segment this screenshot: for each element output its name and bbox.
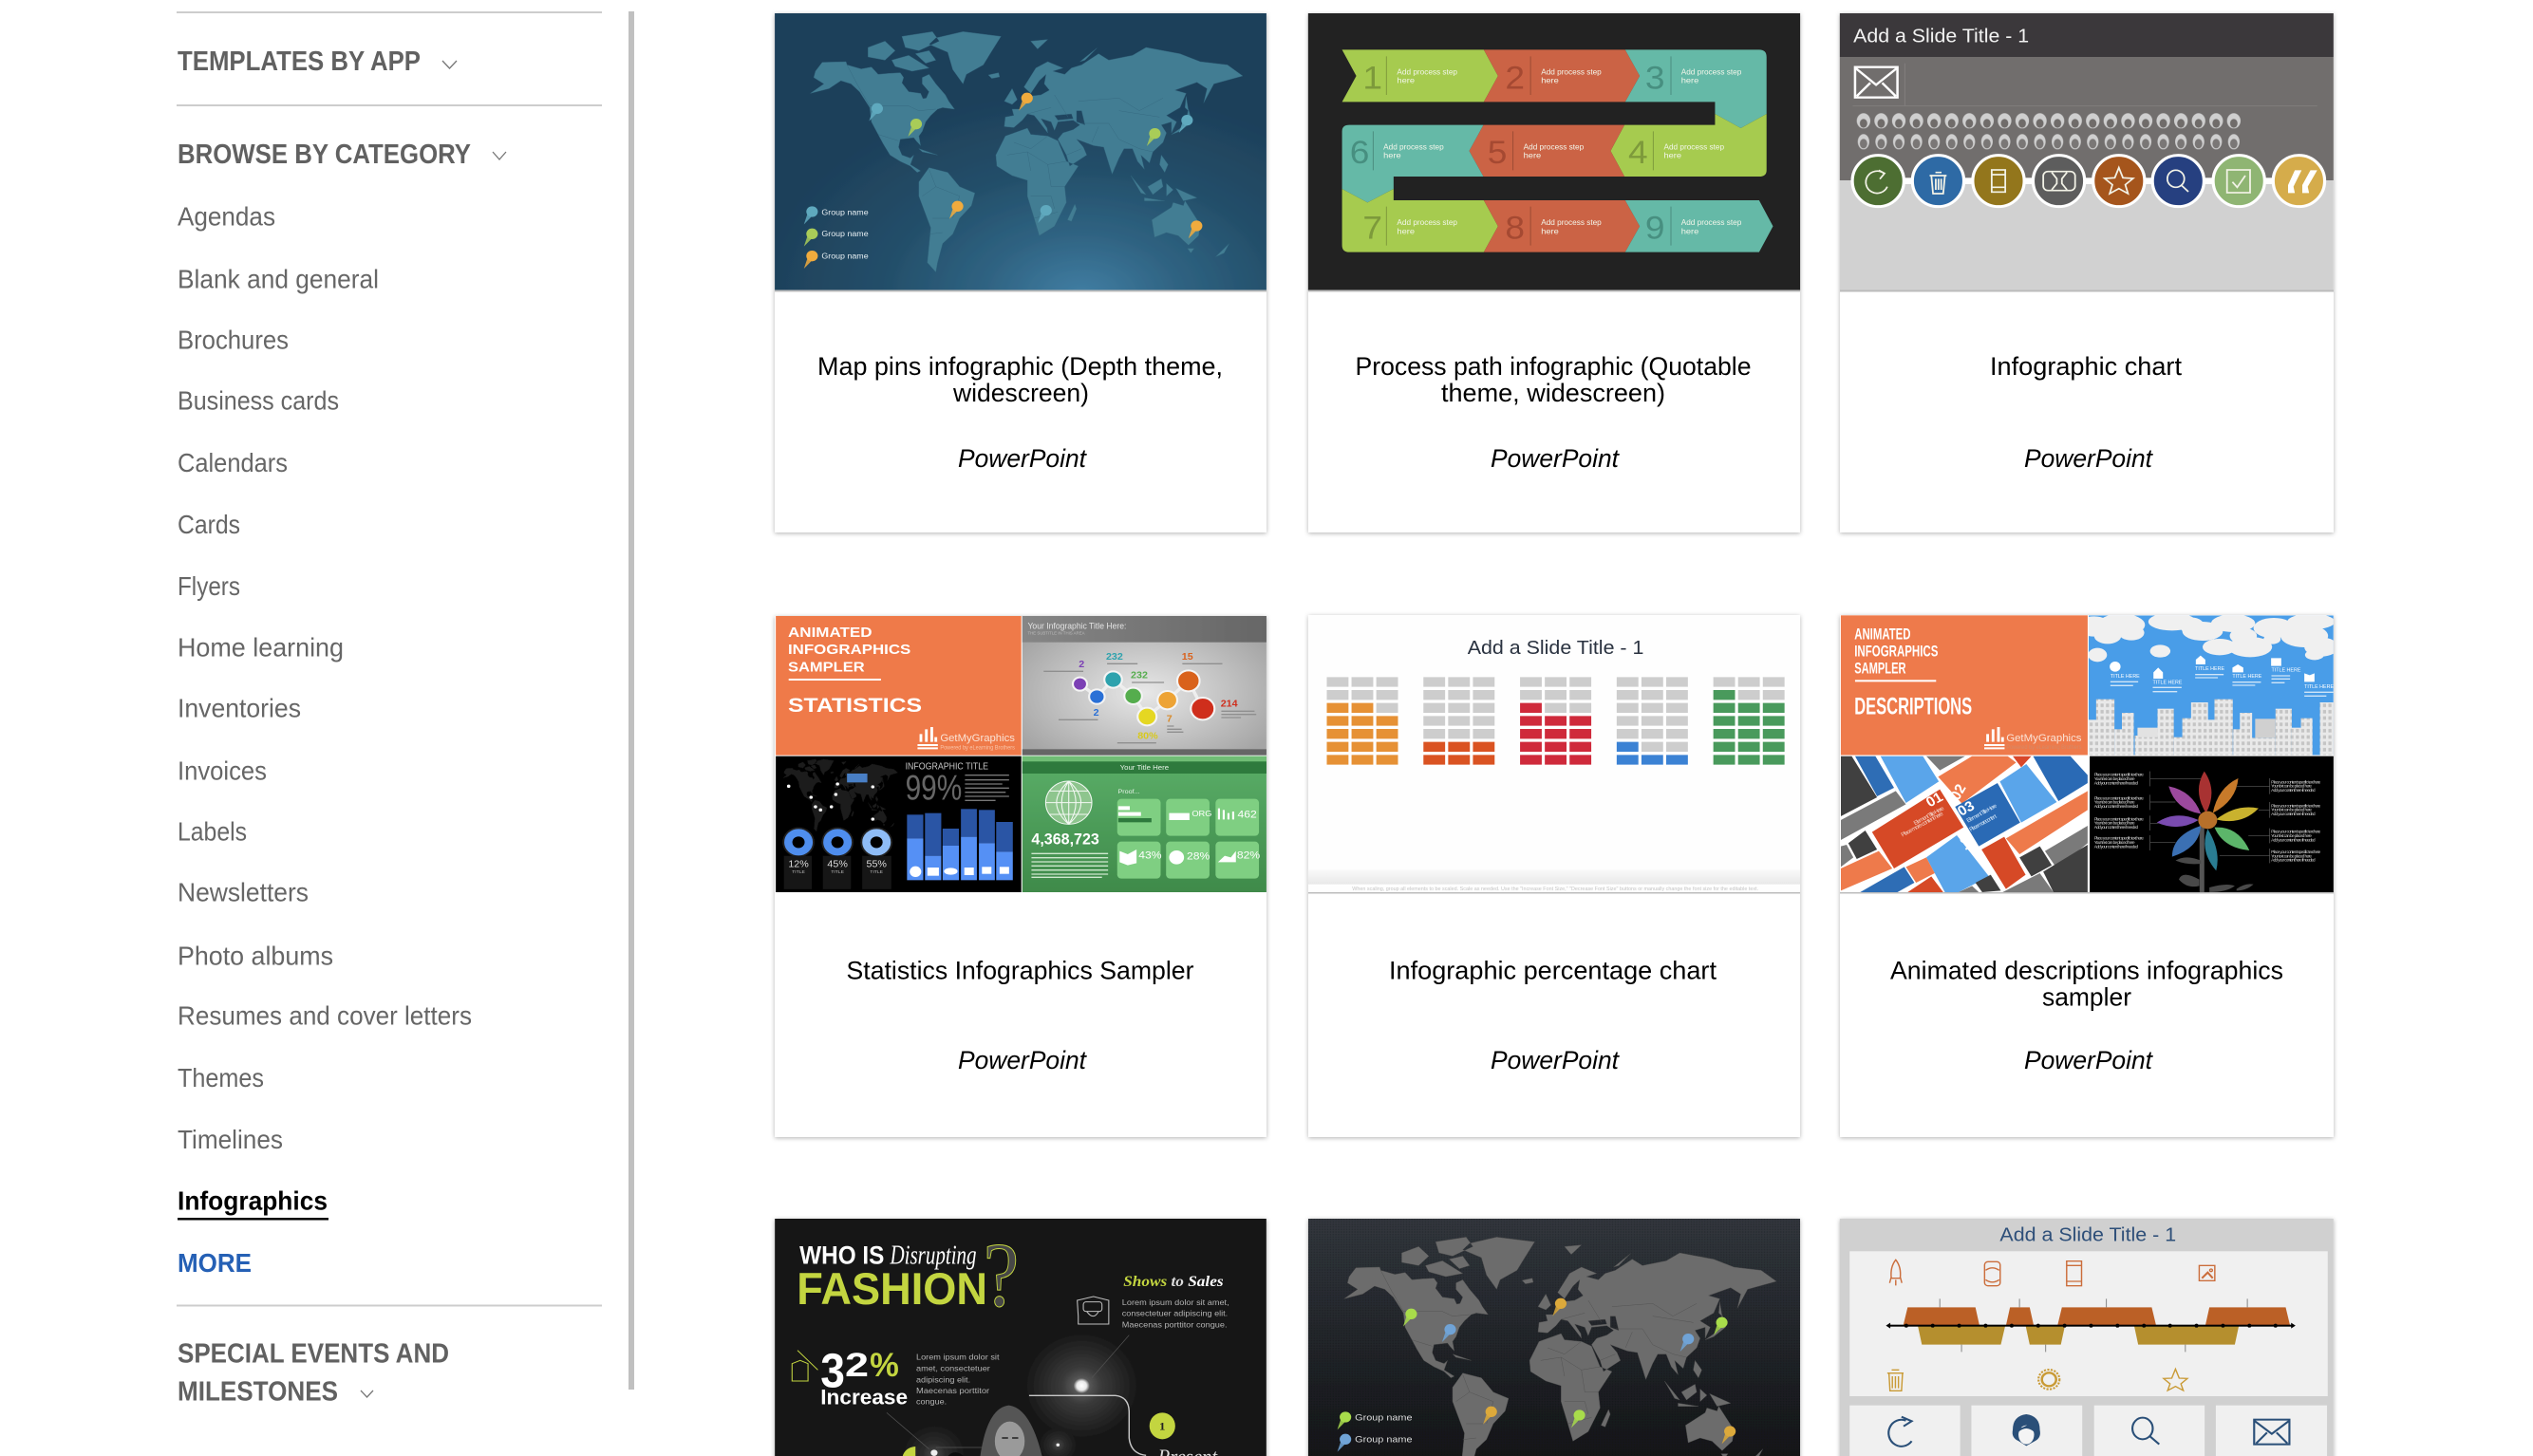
category list (178, 201, 472, 1154)
quadrant: grey chain chart: 80% (1137, 732, 1158, 741)
step labels: here (1681, 227, 1698, 235)
card: animated descriptions infographics sampler (1840, 613, 2338, 1137)
quadrant: clouds and city: TITLE HERE (2152, 681, 2183, 686)
quadrant: green proof (1023, 756, 1266, 892)
category list: Themes (178, 1063, 264, 1092)
icon: globe (1045, 781, 1092, 824)
map pins (869, 93, 1202, 238)
quadrant: green proof: ORG (1191, 809, 1211, 818)
stat: 32 percent: % (870, 1346, 899, 1384)
step labels: here (1397, 227, 1415, 235)
quadrant: orange cover: ANIMATED (1854, 625, 1910, 643)
flower labels: Your text can be placed here (2094, 840, 2135, 845)
category list: Resumes and cover letters (178, 1000, 472, 1031)
icon: virtual reality (1078, 1297, 1109, 1324)
step dividers (1373, 56, 1671, 246)
card: dark world map (1308, 1219, 1800, 1456)
quadrant: diagonal tiles: 01 (1923, 789, 1946, 811)
thumbnail: percentage grid (1308, 615, 1800, 892)
flower labels (2094, 773, 2321, 863)
quadrant: orange cover (1841, 615, 2088, 756)
red column (1520, 703, 1591, 765)
quadrant: orange cover: STATISTICS (788, 694, 922, 717)
badge 1 (1150, 1412, 1175, 1439)
stat: 32 percent (792, 1350, 999, 1406)
map legend (804, 206, 869, 269)
category list: Business cards (178, 385, 339, 416)
flower labels: Your text can be placed here (2271, 853, 2313, 858)
step labels: here (1383, 151, 1401, 160)
quadrant: grey chain chart: THE SUBTITLE IN THIS AREA (1027, 631, 1085, 636)
chain captions (1043, 663, 1256, 743)
step labels: Add process step (1541, 67, 1602, 76)
category list: Blank and general (178, 264, 379, 294)
slide title: Add a Slide Title - 1 (1999, 1223, 2176, 1245)
quadrant: green proof: 82% (1237, 849, 1261, 862)
quadrant: orange cover (776, 616, 1022, 756)
step labels: Add process step (1541, 217, 1602, 227)
flower labels: Add your content here if needed (2271, 837, 2316, 842)
people rows (1855, 113, 2243, 153)
flower labels: Your text can be placed here (2271, 808, 2313, 812)
glows (1033, 1340, 1130, 1431)
stat: 32 percent: 3 (820, 1344, 845, 1398)
timeline curve (1029, 1395, 1146, 1455)
category list: Invoices (178, 756, 267, 786)
map pins (1403, 1298, 1736, 1444)
red-orange column (1423, 742, 1494, 765)
quadrant: black statistics (776, 756, 1022, 892)
quadrant: orange cover: Powered by eLearning Brothers (940, 745, 1015, 751)
bottom icons (1887, 1369, 2187, 1391)
card title: Map pins infographic (Depth theme, (817, 352, 1223, 381)
quadrant: orange cover: SAMPLER (1854, 659, 1906, 677)
donut gauges: TITLE (870, 869, 884, 875)
flower labels: Add your content here if needed (2271, 858, 2316, 863)
card app label: PowerPoint (2024, 1046, 2153, 1074)
category list: Newsletters (178, 877, 309, 907)
quadrant: black statistics: 99% (906, 770, 962, 808)
category list: Flyers (178, 571, 240, 601)
quadrant: grey chain chart: 2 (1094, 708, 1099, 719)
icon: envelope (1855, 67, 1898, 98)
step labels: here (1524, 151, 1541, 160)
step labels: here (1541, 227, 1559, 235)
stat: 32 percent: congue. (916, 1397, 947, 1407)
step numbers: 9 (1645, 209, 1665, 246)
heading: templates by app: TEMPLATES BY APP (178, 47, 421, 77)
card: who is disrupting fashion (775, 1219, 1266, 1456)
icon tiles (1849, 1406, 2327, 1456)
card: infographic percentage chart (1308, 615, 1800, 1137)
flower labels: Add your content here if needed (2094, 804, 2139, 809)
flower labels: Your text can be placed here (2271, 833, 2313, 838)
heading: Disrupting (890, 1241, 977, 1270)
stat: 32 percent: Increase (820, 1385, 908, 1409)
card title: Animated descriptions infographics (1890, 957, 2283, 985)
quadrant: orange cover: INFOGRAPHICS (1854, 642, 1938, 660)
card title: Infographic percentage chart (1389, 957, 1717, 985)
quadrant: grey chain chart: 15 (1182, 652, 1193, 663)
donut gauges (782, 828, 892, 889)
category list: Photo albums (178, 942, 333, 970)
map legend: Group name (1355, 1435, 1412, 1444)
quadrant: clouds and city: TITLE HERE (2195, 666, 2225, 672)
thumbnail: process path (1308, 13, 1800, 290)
map legend: Group name (1355, 1413, 1412, 1423)
card app label: PowerPoint (1491, 444, 1620, 473)
card title: widescreen) (952, 379, 1089, 407)
quadrant: orange cover: DESCRIPTIONS (1854, 694, 1972, 719)
quadrant: orange cover: SAMPLER (788, 660, 865, 675)
shows to sales: Lorem ipsum dolor sit amet, (1122, 1297, 1229, 1307)
quadrant: diagonal tiles (1841, 756, 2088, 892)
flower labels: Place your content specific text here (2094, 816, 2144, 821)
card title: Infographic chart (1990, 352, 2182, 381)
stat: 32 percent: amet, consectetuer (916, 1364, 990, 1372)
card app label: PowerPoint (2024, 444, 2153, 473)
card title: Statistics Infographics Sampler (847, 957, 1194, 985)
card title (817, 352, 1223, 407)
map legend: Group name (821, 252, 869, 260)
flower petals (2157, 772, 2259, 870)
map legend: Group name (821, 229, 869, 238)
heading: WHO IS (799, 1241, 884, 1269)
flower labels: Add your content here if needed (2094, 844, 2139, 849)
icon circles (1852, 156, 2325, 207)
step labels: Add process step (1397, 67, 1457, 76)
card: infographic chart (1840, 13, 2334, 532)
green column (1714, 690, 1785, 765)
category list: Timelines (178, 1125, 283, 1154)
category list: Inventories (178, 693, 301, 723)
card title (1356, 352, 1751, 407)
quadrant: green proof: 28% (1187, 850, 1210, 863)
flower labels: Add your content here if needed (2094, 780, 2139, 785)
flower labels: Place your content specific text here (2271, 849, 2321, 854)
step numbers: 1 (1362, 58, 1382, 96)
quadrant: diagonal tiles: 02 (1947, 782, 1970, 803)
stat: 32 percent: Maecenas porttitor (916, 1386, 989, 1395)
slide title: Add a Slide Title - 1 (1468, 637, 1643, 659)
scrollbar (629, 11, 634, 1390)
quadrant: clouds and city (2077, 613, 2338, 756)
bar chart (907, 809, 1013, 880)
link: more: MORE (178, 1248, 252, 1278)
donut gauges: TITLE (792, 869, 806, 875)
thumbnail: fashion infographic (775, 1219, 1266, 1456)
circle glyphs (1866, 168, 2250, 194)
thumbnail: icon chart (1840, 13, 2334, 290)
map legend: Group name (821, 208, 869, 216)
step labels: here (1681, 76, 1698, 85)
step labels: Add process step (1524, 142, 1584, 151)
thumbnail: statistics collage (776, 616, 1266, 892)
step numbers: 3 (1645, 58, 1665, 96)
category list: Labels (178, 816, 247, 847)
quadrant: orange cover: GetMyGraphics (2006, 732, 2082, 744)
card: statistics infographics sampler (775, 616, 1266, 1137)
quadrant: green proof: Your Title Here (1120, 763, 1169, 772)
flower labels: Place your content specific text here (2094, 836, 2144, 841)
quadrant: clouds and city: TITLE HERE (2271, 667, 2301, 673)
step labels: Add process step (1383, 142, 1444, 151)
heading: special events and milestones: SPECIAL EVENTS AND (178, 1338, 449, 1369)
process path shapes (1342, 49, 1773, 252)
quadrant: green proof: 4,368,723 (1031, 830, 1099, 848)
grey base cells (1326, 677, 1785, 752)
flower labels: Your text can be placed here (2094, 776, 2135, 781)
step labels (1383, 67, 1741, 235)
quadrant: clouds and city: TITLE HERE (2304, 684, 2335, 690)
icon: chevron templates (442, 61, 457, 68)
step numbers: 8 (1505, 209, 1525, 246)
donut gauges: 45% (827, 860, 848, 869)
quadrant: green proof: 462 (1238, 809, 1257, 820)
step numbers (1350, 58, 1665, 246)
category list: Agendas (178, 201, 275, 232)
quadrant: orange cover: INFOGRAPHICS (788, 642, 910, 658)
heading: ? (984, 1223, 1019, 1326)
flower labels: Add your content here if needed (2271, 812, 2316, 816)
card: process path infographic (1308, 13, 1800, 532)
step numbers: 2 (1505, 58, 1525, 96)
flower labels: Place your content specific text here (2271, 803, 2321, 808)
step labels: Add process step (1397, 217, 1457, 227)
quadrant: grey chain chart: 2 (1079, 660, 1085, 670)
category list: Cards (178, 510, 240, 539)
heading: special events and milestones (178, 1338, 449, 1407)
stat: 32 percent: adipiscing elit. (916, 1375, 970, 1384)
flower labels: Your text can be placed here (2094, 821, 2135, 826)
quadrant: orange cover: ANIMATED (788, 625, 872, 641)
badge 1: 1 (1159, 1420, 1165, 1433)
footnote: When scaling, group all elements to be scaled. Scale as needed. Use the "Increase Font Size," "Decrease Font Size" buttons or manually change the font size for the editable text. (1352, 887, 1759, 892)
quadrant: diagonal tiles: Place more content (1968, 813, 1998, 833)
orange column (1326, 703, 1398, 765)
step numbers: 4 (1628, 133, 1648, 171)
flower labels: Add your content here if needed (2094, 825, 2139, 830)
flower labels: Your text can be placed here (2271, 784, 2313, 789)
heading: FASHION (797, 1265, 987, 1315)
shows to sales (1122, 1274, 1229, 1330)
quadrant: diagonal tiles: Element Title Here (1965, 803, 1998, 824)
quadrant: grey chain chart: 214 (1221, 700, 1238, 710)
top icons (1889, 1260, 2215, 1286)
heading: browse by category: BROWSE BY CATEGORY (178, 140, 471, 170)
blue column (1617, 742, 1688, 765)
quadrant: grey chain chart: 7 (1167, 715, 1173, 724)
sidebar navigation (177, 11, 634, 1407)
stat tiles (1117, 799, 1259, 879)
shows to sales: Maecenas porttitor congue. (1122, 1320, 1227, 1330)
card: add a slide title timeline (1840, 1219, 2334, 1456)
flower labels: Place your content specific text here (2271, 779, 2321, 784)
quadrant: diagonal tiles: Element Title Here (1913, 805, 1946, 827)
quadrant: diagonal tiles: Place more content here (1900, 811, 1945, 838)
woman portrait (946, 1406, 1042, 1456)
step numbers: 5 (1488, 133, 1507, 171)
step labels: here (1397, 76, 1415, 85)
card title: theme, widescreen) (1441, 379, 1665, 407)
category list: Home learning (178, 632, 344, 663)
step labels: Add process step (1663, 142, 1724, 151)
icon: chevron browse (493, 152, 506, 159)
step labels: Add process step (1681, 67, 1741, 76)
flower labels: Place your content specific text here (2271, 830, 2321, 834)
step numbers: 7 (1362, 209, 1382, 246)
card app label: PowerPoint (958, 1046, 1087, 1074)
quadrant: clouds and city: TITLE HERE (2232, 674, 2262, 680)
flower labels: Your text can be placed here (2094, 800, 2135, 805)
flower labels: Place your content specific text here (2094, 795, 2144, 800)
step numbers: 6 (1350, 133, 1369, 171)
card title (1890, 957, 2283, 1012)
card title: sampler (2042, 983, 2131, 1012)
quadrant: diagonal tiles: 03 (1955, 798, 1978, 819)
shows to sales: Shows to Sales (1123, 1274, 1224, 1290)
quadrant: diagonal tiles: 04 (1955, 831, 1979, 853)
card app label: PowerPoint (958, 444, 1087, 473)
quadrant: orange cover: Powered by eLearning Brothers (2006, 744, 2081, 751)
quadrant: black statistics: INFOGRAPHIC TITLE (906, 762, 988, 773)
donut gauges: 12% (788, 860, 809, 869)
step labels: here (1541, 76, 1559, 85)
quadrant: grey chain chart: 232 (1131, 671, 1148, 681)
timeline panel (1849, 1251, 2328, 1396)
stat: 32 percent: Lorem ipsum dolor sit (916, 1353, 1000, 1362)
category list: Calendars (178, 448, 288, 477)
thumbnail: timeline slide (1840, 1219, 2334, 1456)
card app label: PowerPoint (1491, 1046, 1620, 1074)
quadrant: grey chain chart: 232 (1106, 652, 1123, 663)
step labels: here (1663, 151, 1681, 160)
quadrant: orange cover: GetMyGraphics (940, 732, 1015, 744)
donut gauges: 55% (866, 860, 887, 869)
quadrant: green proof: 43% (1138, 849, 1162, 862)
shows to sales: consectetuer adipiscing elit. (1122, 1309, 1228, 1318)
connector band (1878, 177, 2298, 184)
slide title: Add a Slide Title - 1 (1853, 25, 2029, 47)
flower labels: Add your content here if needed (2271, 788, 2316, 793)
quadrant: grey chain chart: Your Infographic Title Here: (1027, 622, 1126, 631)
category list: Brochures (178, 325, 289, 355)
heading: special events and milestones: MILESTONES (178, 1376, 338, 1407)
thumbnail: grey world map (1308, 1219, 1800, 1456)
heading (799, 1244, 1016, 1308)
card title: Process path infographic (Quotable (1356, 352, 1751, 381)
thumbnail: blue world map (775, 13, 1266, 290)
stat: 32 percent: 2 (845, 1346, 869, 1384)
quadrant: clouds and city: TITLE HERE (2111, 674, 2140, 680)
quadrant: grey chain chart (1023, 616, 1266, 756)
card: map pins infographic (775, 13, 1266, 532)
donut gauges: TITLE (831, 869, 845, 875)
map legend (1338, 1411, 1412, 1452)
active category: infographics: Infographics (178, 1186, 328, 1215)
quadrant: flower chart (2090, 756, 2334, 892)
flower labels: Place your content specific text here (2094, 773, 2144, 777)
thumbnail: descriptions collage (1841, 613, 2338, 892)
quadrant: green proof: Proof... (1117, 789, 1140, 795)
icon: quotes (2288, 170, 2317, 193)
step labels: Add process step (1681, 217, 1741, 227)
